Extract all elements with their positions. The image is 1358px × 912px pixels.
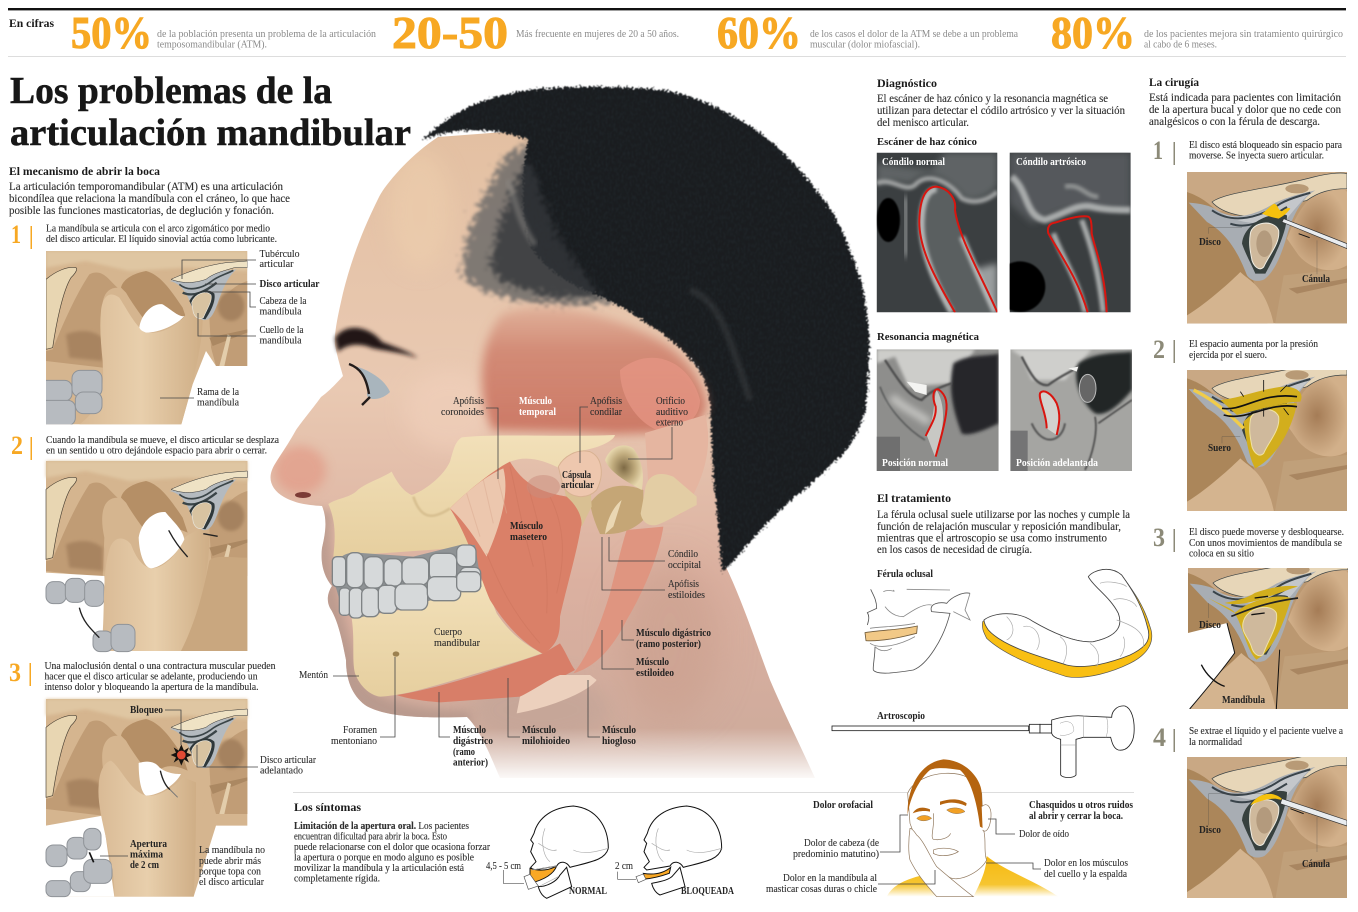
skull diagrams <box>503 806 722 898</box>
step 1 labels: articular <box>260 259 294 270</box>
illustration: inject serum <box>1187 172 1347 332</box>
exposed anatomy in enlarged coordinates <box>328 435 697 713</box>
ear canal bone <box>605 445 643 490</box>
text block: mientras que el artroscopio se usa como instrumento <box>877 532 1107 544</box>
top rule <box>8 8 1346 10</box>
step 1 labels: mandíbula <box>260 306 302 318</box>
MRI captions: Posición adelantada <box>1016 458 1098 469</box>
step 2 number <box>11 431 32 460</box>
grey receding front <box>462 130 640 305</box>
surgery step 2: ejercida por el suero. <box>1189 350 1267 361</box>
lower ear skin <box>645 415 708 515</box>
text block: la apertura o porque en modo alguno es posible <box>294 852 474 864</box>
dark transition strands <box>490 160 600 297</box>
man labels: del cuello y la espalda <box>1044 869 1128 880</box>
step 1 labels: Cabeza de la <box>260 296 307 307</box>
label: stylohyoid: Músculo <box>636 657 669 668</box>
label: condylar process: Apófisis <box>590 396 622 407</box>
label: coronoid: coronoides <box>441 407 484 418</box>
step 2 text: en un sentido u otro dejándole espacio para abrir o cerrar. <box>46 446 267 456</box>
label: arthroscope: Artroscopio <box>877 711 925 722</box>
surgery step 4: Disco <box>1199 825 1221 836</box>
neck of condyle <box>560 468 592 527</box>
surgery step 1: 1 <box>1153 136 1163 165</box>
step 1 labels: Cuello de la <box>260 325 304 336</box>
ear outline over muscle <box>620 358 700 431</box>
mandible <box>352 580 542 697</box>
intro text: La articulación temporomandibular (ATM) es una articulación <box>9 181 283 193</box>
step 3 labels: porque topa con <box>199 866 261 878</box>
surgery step 2: 2 <box>1153 335 1165 364</box>
surgery step 4 <box>1153 723 1347 909</box>
section: surgery <box>1149 75 1348 909</box>
label: masseter: Músculo <box>510 521 543 532</box>
label: stylohyoid: estiloideo <box>636 668 674 679</box>
label: temporal muscle: temporal <box>519 407 556 418</box>
nose and mouth <box>932 813 958 856</box>
digastric muscle, posterior belly <box>573 527 663 673</box>
text block: analgésicos o con la férula de descarga. <box>1149 116 1320 128</box>
scan captions: Cóndilo normal <box>882 157 945 168</box>
icon: arthroscope <box>832 706 1134 777</box>
stat: 60% <box>717 7 1018 58</box>
skin shading <box>274 150 720 745</box>
drawings in enlarged coordinates <box>832 569 1152 777</box>
label: mandibular body: mandibular <box>434 638 481 649</box>
heading: Diagnóstico <box>877 76 937 90</box>
label: masseter: masetero <box>510 532 547 543</box>
label: digastric anterior: (ramo <box>453 747 475 758</box>
surgery step 3: 3 <box>1153 523 1165 552</box>
label: digastric posterior: Músculo digástrico <box>636 628 711 639</box>
text block: en los casos de necesidad de cirugía. <box>877 544 1032 556</box>
icon: skull with splint <box>865 589 970 673</box>
label: ear canal: auditivo <box>656 407 688 418</box>
stat: 20-50 <box>392 7 679 58</box>
label: mylohyoid: milohioideo <box>522 736 570 747</box>
section: symptoms <box>293 759 1134 898</box>
scan captions: Cóndilo artrósico <box>1016 157 1086 168</box>
scan captions <box>882 157 1086 168</box>
label: styloid process <box>668 579 705 601</box>
head skin <box>270 130 815 778</box>
text block: Limitación de la apertura oral. Los pacientes <box>294 821 469 832</box>
dark main hair <box>422 87 869 572</box>
step 2 text <box>46 435 279 456</box>
stat: 20-50: Más frecuente en mujeres de 20 a 50 años. <box>516 29 679 40</box>
heading: Los síntomas <box>294 800 361 814</box>
step 1 labels: Disco articular <box>260 279 320 290</box>
surgery step 3: Mandíbula <box>1222 695 1265 706</box>
label: digastric anterior <box>453 725 493 768</box>
step 3 labels: Disco articular <box>260 755 317 766</box>
label: digastric posterior <box>636 628 711 650</box>
step 3 labels: puede abrir más <box>199 856 261 867</box>
label: occlusal splint: Férula oclusal <box>877 569 933 580</box>
text block: El escáner de haz cónico y la resonancia magnética se <box>877 93 1108 105</box>
step 1 text: del disco articular. El líquido sinovial actúa como lubricante. <box>46 234 277 245</box>
hand on cheek <box>909 828 973 897</box>
image: forward position <box>1010 349 1132 471</box>
temporal muscle <box>482 307 707 434</box>
label: condylar process: condilar <box>590 407 623 418</box>
step 1 labels: Rama de la <box>197 387 240 398</box>
step 3 text <box>44 661 276 693</box>
text block <box>294 821 491 884</box>
label: mandibular body: Cuerpo <box>434 627 462 638</box>
styloid process <box>605 500 622 534</box>
man labels: Dolor de cabeza (de <box>804 838 880 849</box>
brows <box>913 799 967 813</box>
label: occipital condyle: occipital <box>668 560 701 571</box>
step 2 illustration <box>46 461 247 652</box>
label: mylohyoid: Músculo <box>522 725 556 736</box>
stat: 20-50: 20-50 <box>392 7 508 58</box>
stat: 60%: 60% <box>717 7 801 58</box>
surgery step 4: la normalidad <box>1189 737 1242 748</box>
mastoid bone <box>641 474 697 525</box>
surgery step 3 <box>1153 523 1348 713</box>
step 1 number: 1 <box>11 220 21 249</box>
surgery step 2: Suero <box>1208 443 1231 454</box>
step 1 labels: Tubérculo <box>260 249 300 260</box>
icon: occlusal splint <box>982 569 1152 677</box>
surgery step 3: Con unos movimientos de mandíbula se <box>1189 538 1342 549</box>
step 2 text: Cuando la mandíbula se mueve, el disco articular se desplaza <box>46 435 279 446</box>
step 1 labels: mandíbula <box>260 336 302 346</box>
ear <box>982 805 991 831</box>
title <box>10 70 411 154</box>
label: occipital condyle <box>668 549 701 571</box>
step 3 labels: Apertura <box>130 839 167 850</box>
intro text: posible las funciones masticatorias, de deglución y fonación. <box>9 205 274 217</box>
nostril <box>295 492 311 498</box>
label: temporal muscle <box>519 396 556 418</box>
tooth backing <box>332 545 482 618</box>
illustration: space grows <box>1187 370 1347 511</box>
step 3 labels: Bloqueo <box>130 705 163 716</box>
step 1 labels: mandíbula <box>197 398 240 408</box>
surgery step 2: El espacio aumenta por la presión <box>1189 339 1318 350</box>
step 3 labels: La mandíbula no <box>199 845 265 856</box>
eye <box>349 364 390 405</box>
stat: 50%: 50% <box>71 7 152 58</box>
stat: 60%: muscular (dolor miofascial). <box>810 40 920 50</box>
step 3 text: Una maloclusión dental o una contractura muscular pueden <box>44 661 276 672</box>
label: temporal muscle: Músculo <box>519 396 552 407</box>
masseter muscle <box>450 462 582 654</box>
skull labels <box>486 861 735 897</box>
label: coronoid: Apófisis <box>453 396 484 407</box>
heading: El mecanismo de abrir la boca <box>9 164 160 178</box>
sub-heading: MRI: Resonancia magnética <box>877 331 980 343</box>
scan: normal condyle <box>877 153 997 312</box>
eyes <box>917 808 965 821</box>
MRI captions: Posición normal <box>882 458 948 469</box>
section: mechanism of opening the mouth <box>9 164 320 897</box>
image: normal position <box>877 349 999 471</box>
label: capsule <box>561 470 594 491</box>
text block: encuentran dificultad para abrir la boca. Esto <box>294 832 447 842</box>
hyoglossus and hyoid tendon <box>517 675 597 713</box>
label: capsule: Cápsula <box>562 470 591 481</box>
text block: completamente rígida. <box>294 874 380 884</box>
face <box>908 773 987 879</box>
label: masseter <box>510 521 547 543</box>
section: treatment <box>832 491 1152 777</box>
eyebrow <box>335 328 418 358</box>
step 3 labels: adelantado <box>260 766 303 776</box>
man labels <box>766 800 1133 895</box>
text block: de la apertura bucal y dolor que no cede con <box>1149 104 1341 116</box>
hair <box>422 87 869 572</box>
step 1 illustration <box>39 251 247 425</box>
illustration: fluid removed <box>1187 757 1347 898</box>
surgery step 1: moverse. Se inyecta suero articular. <box>1189 150 1324 162</box>
text block <box>877 509 1130 556</box>
step 1 labels <box>160 249 320 408</box>
title: Los problemas de la <box>10 70 332 112</box>
stat: 50% <box>71 7 376 58</box>
scan: arthrosic condyle <box>1010 152 1131 312</box>
surgery step 3: coloca en su sitio <box>1189 548 1254 560</box>
lower teeth <box>339 572 481 618</box>
surgery step 4: 4 <box>1153 723 1166 752</box>
label: capsule: articular <box>561 480 594 491</box>
text block: puede relacionarse con el dolor que ocasiona forzar <box>294 842 491 853</box>
neck fade to white <box>470 728 840 782</box>
illustration: man with jaw pain <box>887 759 1058 897</box>
label: mental foramen: mentoniano <box>331 736 377 747</box>
step 3 illustration <box>46 699 247 897</box>
label: digastric anterior: anterior) <box>453 758 488 768</box>
man labels: Dolor en los músculos <box>1044 858 1128 869</box>
surgery step 3: El disco puede moverse y desbloquearse. <box>1189 527 1344 538</box>
label: digastric anterior: digástrico <box>453 736 493 747</box>
joint capsule <box>558 451 601 497</box>
illustration: disc repositioned <box>1188 568 1348 709</box>
icon: locked skull <box>618 806 722 895</box>
surgery step 1: El disco está bloqueado sin espacio para <box>1189 140 1342 151</box>
stat: 80% <box>1051 7 1343 58</box>
step 3 labels: el disco articular <box>199 877 265 888</box>
intro text <box>9 181 290 217</box>
illustration: head profile with exposed jaw anatomy <box>270 87 869 782</box>
label: ear canal <box>656 396 688 428</box>
styloid and occipital region <box>590 486 643 534</box>
mental foramen <box>393 651 399 657</box>
stat: 80%: al cabo de 6 meses. <box>1144 40 1217 50</box>
step 1 text: La mandíbula se articula con el arco zigomático por medio <box>46 224 270 234</box>
text block: Está indicada para pacientes con limitación <box>1149 92 1341 104</box>
step 3 text: hacer que el disco articular se adelante, produciendo un <box>44 672 258 682</box>
surgery step 2 <box>1153 335 1347 518</box>
step 3 labels <box>100 705 317 888</box>
step 3 number: 3 <box>9 658 21 687</box>
text block: función de relajación muscular y reposición mandibular, <box>877 521 1121 533</box>
surgery step 1: Disco <box>1199 237 1221 248</box>
label: digastric posterior: (ramo posterior) <box>636 639 701 650</box>
text block <box>877 93 1125 129</box>
stat: 80%: 80% <box>1051 7 1135 58</box>
label: mental foramen: Foramen <box>343 725 377 736</box>
icon: lock star <box>171 744 192 766</box>
skull labels: NORMAL <box>569 886 607 897</box>
head anatomy labels and leader lines <box>299 396 711 768</box>
surgery step 4: Se extrae el líquido y el paciente vuelve a <box>1189 726 1343 737</box>
scans drawn in enlarged coordinates <box>877 153 1131 312</box>
text block: utilizan para detectar el códilo artrósico y ver la situación <box>877 105 1125 117</box>
text block <box>1149 92 1341 128</box>
intro text: bicondílea que relaciona la mandíbula con el cráneo, lo que hace <box>9 193 290 205</box>
label: digastric anterior: Músculo <box>453 725 486 736</box>
title: articulación mandibular <box>10 112 411 154</box>
hair <box>908 759 983 828</box>
strip heading: En cifras <box>9 16 54 30</box>
label: hyoglossus <box>602 725 636 747</box>
label: coronoid <box>441 396 484 418</box>
heading: La cirugía <box>1149 75 1199 89</box>
man labels: al abrir y cerrar la boca. <box>1029 811 1123 822</box>
step 2 number: 2 <box>11 431 23 460</box>
surgery step 1 <box>1153 136 1347 332</box>
mylohyoid muscle <box>397 643 575 702</box>
sub-heading: cone beam: Escáner de haz cónico <box>877 136 977 148</box>
MRI captions <box>882 458 1098 469</box>
icon: normal opening skull <box>503 806 608 898</box>
label: stylohyoid <box>636 657 674 679</box>
temporal shadow on the arch <box>527 475 560 498</box>
step 3 number <box>9 658 31 687</box>
MRI images <box>877 349 1132 471</box>
label: condylar process <box>590 396 623 418</box>
skull labels: BLOQUEADA <box>681 886 735 897</box>
upper teeth <box>332 545 481 588</box>
label: styloid process: Apófisis <box>668 579 699 590</box>
step 3 labels: de 2 cm <box>130 860 160 871</box>
step 1 text <box>46 224 277 245</box>
stat: 50%: temposomandibular (ATM). <box>157 40 267 50</box>
upper jaw and zygomatic arch <box>328 435 615 557</box>
man labels: Dolor de oído <box>1019 829 1069 840</box>
stat: 80%: de los pacientes mejora sin tratamiento quirúrgico <box>1144 29 1343 40</box>
text block: del menisco articular. <box>877 117 969 129</box>
step 3 text: intenso dolor y bloqueando la apertura de la mandíbula. <box>44 682 258 693</box>
label: mylohyoid <box>522 725 570 747</box>
skull labels: 2 cm <box>615 861 633 872</box>
stat: 60%: de los casos el dolor de la ATM se debe a un problema <box>810 29 1018 40</box>
statistics strip: En cifras <box>9 7 1343 58</box>
man labels: predominio matutino) <box>793 849 879 860</box>
label: occipital condyle: Cóndilo <box>668 549 698 560</box>
label: styloid process: estiloides <box>668 590 705 601</box>
man labels: Dolor orofacial <box>813 800 873 811</box>
skull labels: 4,5 - 5 cm <box>486 861 521 872</box>
label: chin: Mentón <box>299 670 328 681</box>
label: ear canal: Orificio <box>656 396 685 407</box>
label: mental foramen <box>331 725 377 747</box>
shoulders <box>887 856 1058 897</box>
stat: 50%: de la población presenta un problema de la articulación <box>157 29 376 40</box>
surgery step 1: Cánula <box>1302 274 1330 285</box>
man labels: Dolor en la mandíbula al <box>783 873 877 884</box>
label: ear canal: externo <box>656 418 683 428</box>
step 1 number <box>11 220 32 249</box>
label: hyoglossus: hiogloso <box>602 736 636 747</box>
section: diagnosis <box>877 76 1132 471</box>
label: mandibular body <box>434 627 481 649</box>
greying temple highlight <box>508 180 535 245</box>
text block: movilizar la mandíbula y la articulación está <box>294 863 464 874</box>
cheek bone shadow <box>413 497 450 516</box>
text block: La férula oclusal suele utilizarse por las noches y cumple la <box>877 509 1130 521</box>
man labels: Chasquidos u otros ruidos <box>1029 800 1133 811</box>
heading: El tratamiento <box>877 491 951 505</box>
surgery step 4: Cánula <box>1302 859 1330 870</box>
step 3 labels: máxima <box>130 850 163 860</box>
man labels: masticar cosas duras o chicle <box>766 884 878 895</box>
label: hyoglossus: Músculo <box>602 725 636 736</box>
surgery step 3: Disco <box>1199 620 1221 631</box>
